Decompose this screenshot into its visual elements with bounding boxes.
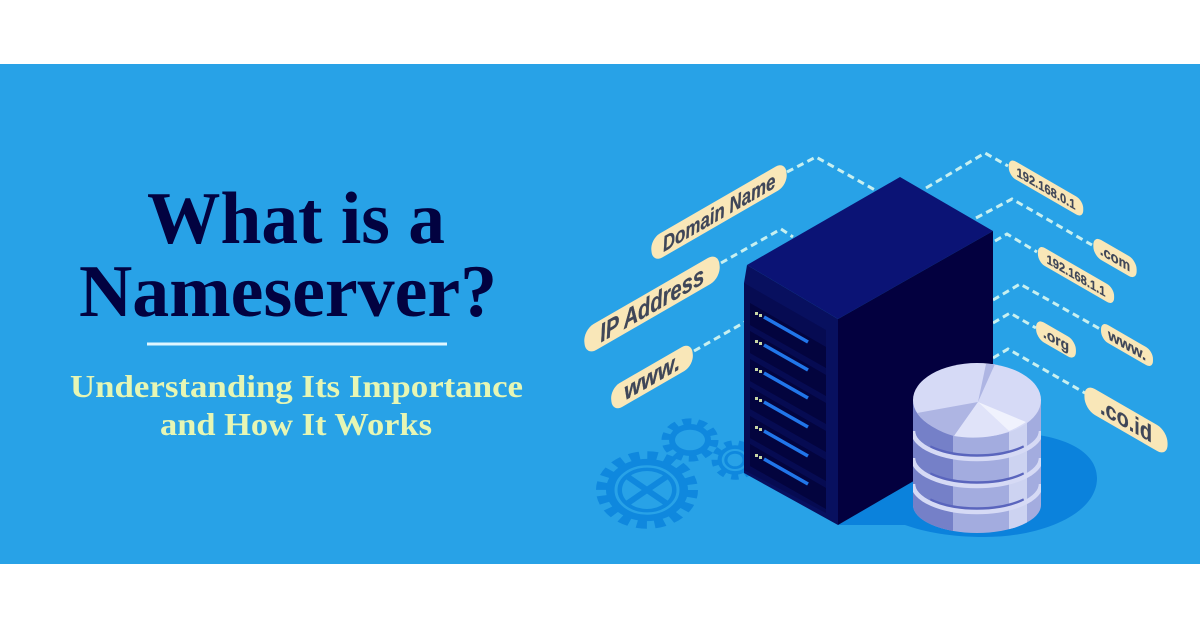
label: 192.168.0.1: [1009, 158, 1083, 218]
icon: server tower: [744, 177, 993, 525]
label: .com: [1093, 236, 1137, 280]
small gear: [716, 444, 754, 476]
dashed connector lines: [694, 153, 1100, 393]
subtitle: Understanding Its Importance: [70, 368, 523, 404]
label: 192.168.0.1: 192.168.0.1: [1017, 164, 1075, 213]
drawer LEDs: [755, 312, 762, 459]
top disc pie slices: [917, 402, 978, 436]
server right face: [838, 231, 993, 525]
icon: database cylinder: [913, 363, 1041, 535]
ring shadows: [930, 447, 1024, 509]
subtitle: and How It Works: [160, 406, 432, 442]
database top disc: [913, 363, 1041, 437]
server top face: [747, 177, 993, 319]
label: 192.168.1.1: [1038, 244, 1114, 306]
label: www. right: www.: [1107, 325, 1146, 365]
label: Domain Name: Domain Name: [662, 169, 777, 257]
label: www. left: www.: [623, 348, 681, 406]
database body layers: [913, 395, 1041, 535]
label: www. right: [1101, 321, 1153, 369]
blue banner background: [0, 64, 1200, 564]
label: www. left: [610, 340, 694, 414]
title divider: [147, 342, 447, 346]
database separator rings: [913, 431, 1041, 512]
title: Nameserver?: [79, 251, 497, 333]
infographic canvas: [0, 64, 1200, 564]
title: [79, 178, 497, 333]
subtitle: [70, 368, 523, 442]
medium gear: [666, 422, 714, 458]
label: 192.168.1.1: 192.168.1.1: [1047, 251, 1105, 300]
label: .com: .com: [1100, 241, 1130, 276]
label: .co.id: [1084, 383, 1168, 458]
icon: gears: [602, 422, 754, 524]
label: IP Address: IP Address: [599, 261, 705, 348]
label: .co.id: .co.id: [1100, 392, 1152, 449]
large gear: [602, 456, 692, 524]
ground shadow: [838, 433, 1097, 537]
server front face: [744, 265, 838, 525]
title: What is a: [147, 178, 445, 260]
label: .org: [1036, 318, 1076, 361]
label: .org: .org: [1043, 324, 1069, 356]
drawer indicator bars: [764, 317, 808, 484]
rack drawers: [750, 303, 826, 509]
